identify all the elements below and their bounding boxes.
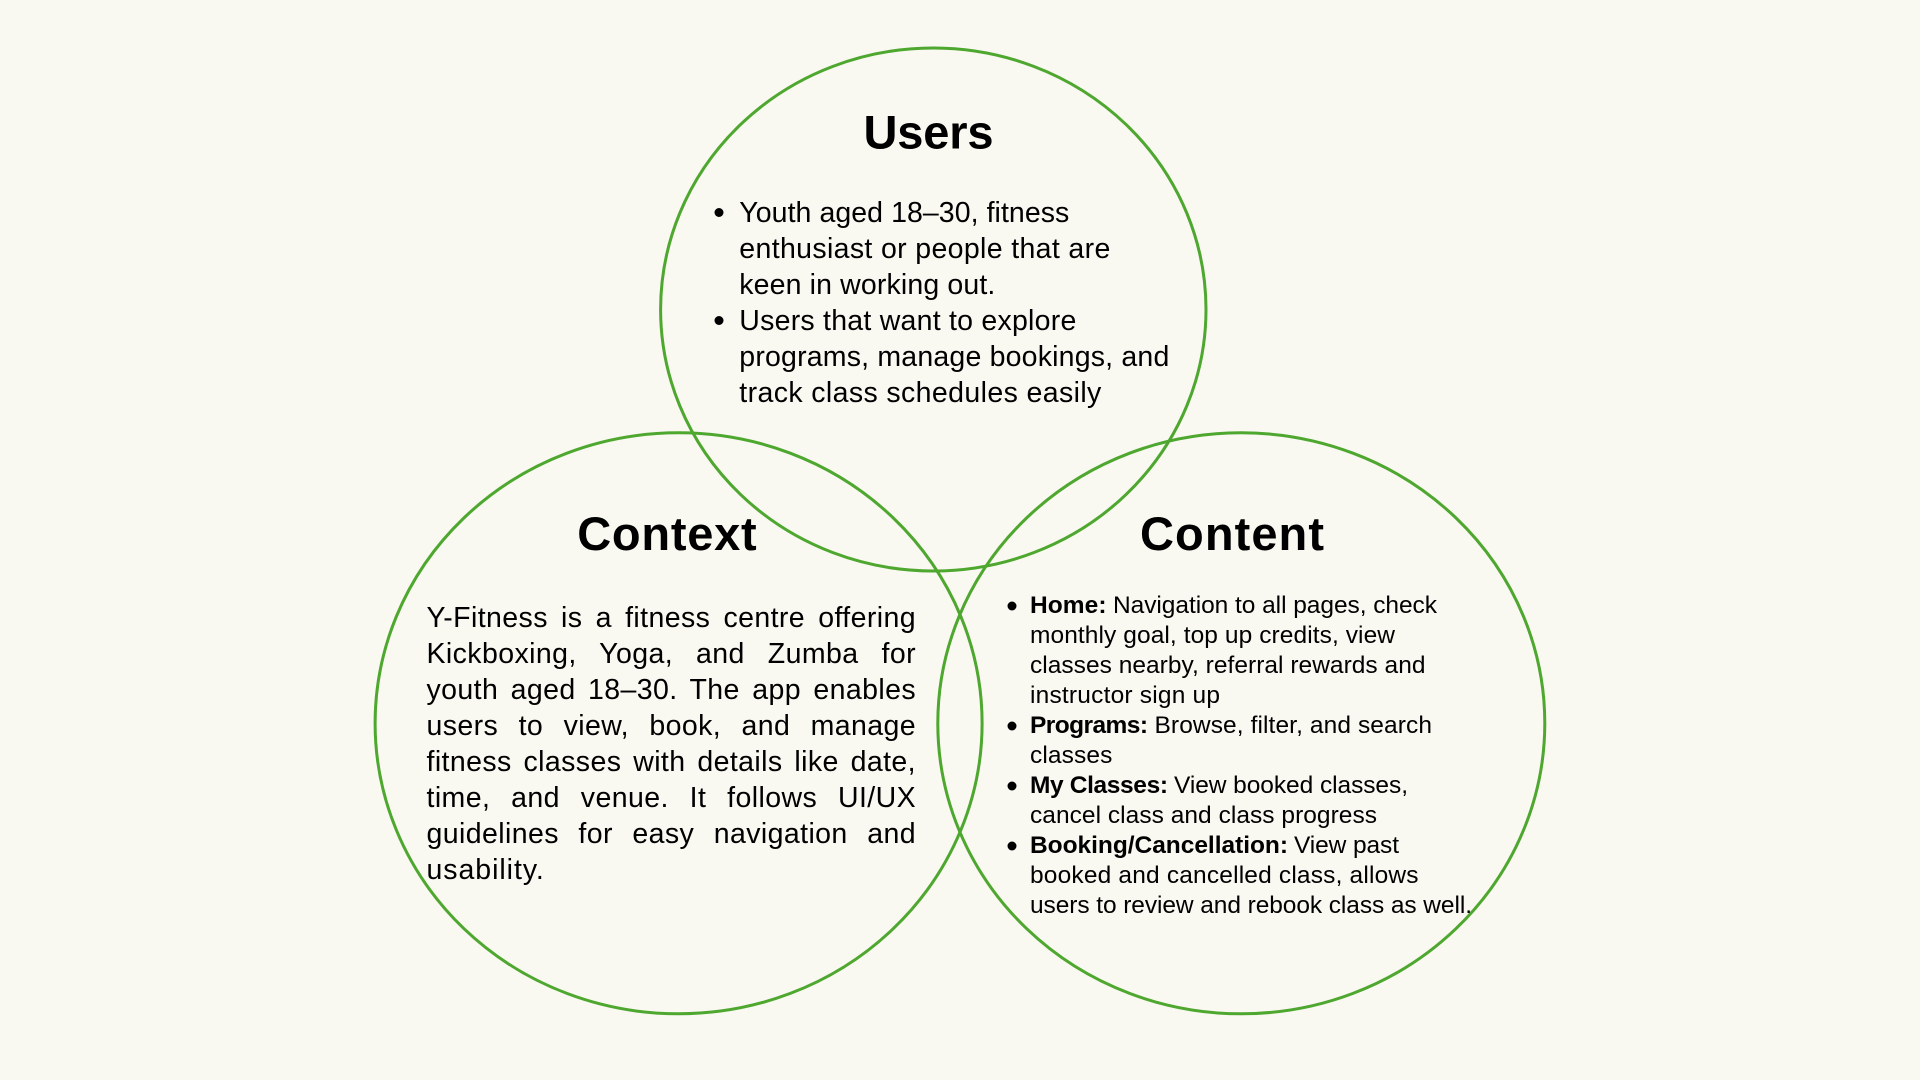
content list: Home: [1030,592,1106,619]
context paragraph: youth aged 18–30. The app enables [426,674,916,706]
heading: content: Content [1140,507,1324,560]
users list: track class schedules easily [739,377,1102,409]
content list: Browse, filter, and search [1154,712,1432,739]
content circle [938,433,1545,1014]
heading: context: Context [577,507,757,560]
users list: keen in working out. [739,269,995,301]
context paragraph: fitness classes with details like date, [426,746,916,778]
users list: Youth aged 18–30, fitness [739,197,1069,229]
content list: Navigation to all pages, check [1113,592,1438,619]
content list [1008,592,1472,919]
content list: classes [1030,742,1112,769]
users list [714,197,1169,409]
users circle [661,48,1206,571]
panel: users [661,48,1206,571]
panel: context [375,433,982,1014]
content list: Booking/Cancellation: [1030,832,1288,859]
context paragraph: users to view, book, and manage [426,710,916,742]
content list: Programs: [1030,712,1148,739]
content list: booked and cancelled class, allows [1030,862,1418,889]
content list: classes nearby, referral rewards and [1030,652,1426,679]
content list: users to review and rebook class as well. [1030,892,1472,919]
users list: programs, manage bookings, and [739,341,1169,373]
context paragraph: Kickboxing, Yoga, and Zumba for [426,638,916,670]
content list: instructor sign up [1030,682,1220,709]
content list: View past [1294,832,1399,859]
users list: enthusiast or people that are [739,233,1110,265]
content list: My Classes: [1030,772,1168,799]
context paragraph: usability. [426,854,545,886]
context paragraph: time, and venue. It follows UI/UX [426,782,916,814]
context paragraph [426,602,916,886]
content list: cancel class and class progress [1030,802,1377,829]
context circle [375,433,982,1014]
content list: monthly goal, top up credits, view [1030,622,1395,649]
panel: content [938,433,1545,1014]
context paragraph: guidelines for easy navigation and [426,818,916,850]
content list: View booked classes, [1174,772,1408,799]
users list: Users that want to explore [739,305,1076,337]
context paragraph: Y-Fitness is a fitness centre offering [426,602,916,634]
heading: users: Users [864,106,994,159]
